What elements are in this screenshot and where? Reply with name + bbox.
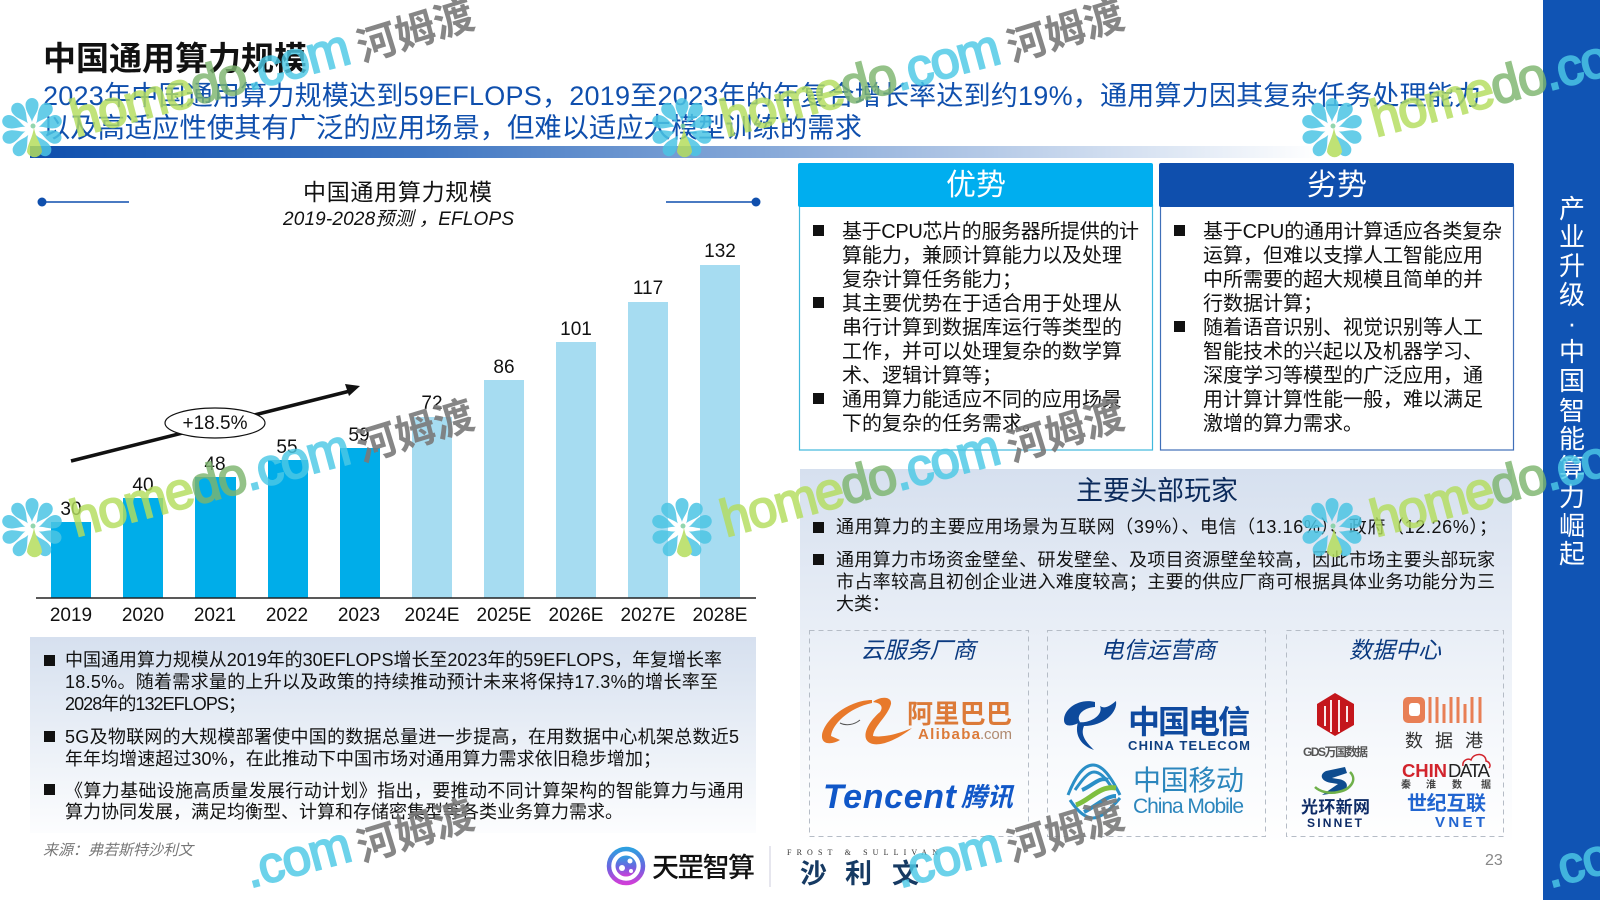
sidebar: 能 [1559, 424, 1585, 454]
bar chart: 30 [60, 499, 82, 520]
watermark layer: homedo.com [64, 418, 356, 549]
growth oval label [165, 408, 265, 438]
panel: disadvantages: 中所需要的超大规模且简单的并 [1203, 268, 1483, 291]
sidebar: 算 [1559, 453, 1585, 483]
logo: Chindata: DATA [1448, 760, 1491, 781]
panel: advantages: 术、逻辑计算等； [842, 364, 1002, 387]
panel: advantages: 复杂计算任务能力； [842, 268, 1022, 291]
logo: Frost and Sullivan [787, 848, 938, 889]
panel: advantages: 算能力，兼顾计算能力以及处理 [842, 244, 1122, 267]
box: cloud vendors [810, 630, 1028, 836]
logo: Tencent [823, 778, 1015, 816]
sidebar: 业 [1559, 222, 1585, 252]
watermark layer: homedo.com [714, 18, 1006, 149]
bar chart: 2027E [621, 605, 675, 626]
watermark layer: .com [238, 816, 357, 899]
bar chart: 40 [132, 475, 154, 496]
panel: key players: 通用算力市场资金壁垒、研发壁垒、及项目资源壁垒较高，因此市场主要头部玩家 [836, 550, 1495, 570]
title decoration left [38, 198, 129, 206]
logo: SINNET: SINNET [1307, 816, 1363, 830]
bar chart: 2025E [477, 605, 531, 626]
title: 中国通用算力规模 [43, 40, 307, 77]
panel: key players: 大类： [836, 594, 890, 614]
source note: 来源：弗若斯特沙利文 [43, 842, 195, 859]
watermark layer: homedo.com [714, 418, 1006, 549]
header gradient bar [30, 146, 1320, 158]
panel: chart commentary: 18.5%。随着需求量的上升以及政策的持续推动预计未来将保持17.3%的增长率至 [65, 672, 718, 692]
growth arrow [71, 384, 360, 461]
panel: disadvantages: 运算，但难以支撑人工智能应用 [1203, 244, 1483, 267]
logo: data port: 数据港 [1405, 731, 1483, 751]
panel: advantages: 其主要优势在于适合用于处理从 [842, 292, 1122, 315]
panel: chart commentary: 2028年的132EFLOPS； [65, 694, 246, 714]
bar chart: 2019 [50, 605, 92, 626]
panel: advantages: 基于CPU芯片的服务器所提供的计 [842, 220, 1139, 243]
panel: disadvantages [1159, 163, 1514, 450]
panel: advantages [798, 163, 1153, 450]
logo: VNET [1407, 792, 1486, 831]
panel: chart [36, 179, 760, 626]
logo: GDS: GDS万国数据 [1303, 744, 1368, 759]
logo: VNET: VNET [1435, 814, 1485, 831]
watermark layer: 河姆渡 [1002, 393, 1129, 471]
chart title: 中国通用算力规模 [303, 179, 492, 205]
logo: Alibaba: Alibaba [918, 726, 981, 743]
sidebar: 升 [1559, 251, 1585, 281]
box: telecom carriers: 电信运营商 [1100, 637, 1218, 663]
bar chart: 59 [348, 425, 370, 446]
panel: disadvantages: 行数据计算； [1203, 292, 1323, 315]
logo: Chindata: CHIN [1402, 760, 1447, 781]
panel: key players [800, 469, 1512, 845]
sidebar: 力 [1559, 482, 1585, 512]
logo: China Telecom [1064, 701, 1250, 753]
panel: chart commentary: 中国通用算力规模从2019年的30EFLOPS增长至2023年的59EFLOPS，年复增长率 [65, 650, 722, 670]
logo: SINNET [1301, 767, 1370, 830]
logo: Frost and Sullivan: 沙利文 [800, 859, 919, 889]
subtitle: 以及高适应性使其有广泛的应用场景，但难以适应大模型训练的需求 [43, 112, 862, 143]
logo: China Mobile: 中国移动 [1133, 765, 1244, 796]
logo: China Mobile: China Mobile [1133, 795, 1244, 818]
panel: disadvantages: 随着语音识别、视觉识别等人工 [1203, 316, 1483, 339]
watermark layer: homedo.com [64, 18, 356, 149]
panel: advantages: 通用算力能适应不同的应用场景 [842, 388, 1122, 411]
logo: Frost and Sullivan: FROST & SULLIVAN [787, 848, 938, 857]
sidebar [1543, 0, 1600, 900]
panel: chart commentary: 5G及物联网的大规模部署使中国的数据总量进一步提高，在用数据中心机架总数近5 [65, 727, 739, 747]
box: data centers [1286, 630, 1504, 836]
logo: China Telecom: 中国电信 [1128, 704, 1250, 740]
logo: China Mobile [1068, 765, 1244, 818]
disadvantages header: 劣势 [1307, 169, 1367, 202]
disadvantages header [1159, 163, 1514, 207]
logo divider [769, 846, 771, 887]
logo: Tencent: Tencent [823, 778, 958, 816]
bar chart: 117 [633, 278, 663, 299]
logo: Tianzheng compute: 天罡智算 [652, 853, 755, 883]
logo: Tencent: 腾讯 [961, 782, 1015, 812]
page number: 23 [1485, 852, 1503, 869]
sidebar: 崛 [1559, 511, 1585, 541]
sidebar: 产 [1559, 194, 1585, 224]
panel: advantages: 串行计算到数据库运行等类型的 [842, 316, 1122, 339]
sidebar: 中 [1559, 337, 1585, 367]
bar chart: 55 [276, 437, 298, 458]
panel: disadvantages: 智能技术的兴起以及机器学习、 [1203, 340, 1483, 363]
sidebar: 级 [1559, 280, 1585, 310]
watermark layer: .com [888, 816, 1007, 899]
sidebar: 起 [1559, 539, 1585, 569]
box: data centers: 数据中心 [1349, 637, 1442, 663]
bar chart: 101 [560, 319, 592, 340]
bar chart: 2022 [266, 605, 308, 626]
bar chart: 2023 [338, 605, 380, 626]
bar chart: 2024E [405, 605, 459, 626]
bar chart: 2020 [122, 605, 164, 626]
panel: advantages: 工作，并可以处理复杂的数学算 [842, 340, 1122, 363]
logo: GDS [1303, 693, 1368, 759]
bar chart: 72 [421, 393, 443, 414]
panel: disadvantages: 基于CPU的通用计算适应各类复杂 [1203, 220, 1502, 243]
bar chart: 2028E [693, 605, 747, 626]
logo: China Telecom: CHINA TELECOM [1128, 738, 1250, 753]
panel: disadvantages: 激增的算力需求。 [1203, 412, 1363, 435]
box: cloud vendors: 云服务厂商 [860, 637, 978, 663]
panel: chart commentary: 年年均增速超过30%，在此推动下中国市场对通用算力需求依旧稳步增加； [65, 749, 661, 769]
panel: chart commentary: 算力协同发展，满足均衡型、计算和存储密集型等各类业务算力需求。 [65, 802, 623, 822]
sidebar: 国 [1559, 366, 1585, 396]
logo: VNET: 世纪互联 [1407, 792, 1486, 815]
watermark layer: 河姆渡 [1002, 793, 1129, 871]
logo: Alibaba [822, 698, 1012, 744]
sidebar: 智 [1559, 396, 1585, 426]
panel: chart commentary [30, 637, 756, 833]
panel: key players: 通用算力的主要应用场景为互联网（39%）、电信（13.16%）、政府（12.26%）； [836, 517, 1497, 537]
watermark layer: 河姆渡 [352, 393, 479, 471]
growth oval label: +18.5% [183, 413, 248, 434]
key players heading: 主要头部玩家 [1076, 476, 1238, 506]
bar chart: 2021 [194, 605, 236, 626]
panel: advantages: 下的复杂的任务需求。 [842, 412, 1042, 435]
advantages header: 优势 [946, 169, 1006, 202]
subtitle: 2023年中国通用算力规模达到59EFLOPS，2019至2023年的年复合增长率达到约19%，通用算力因其复杂任务处理能力 [43, 81, 1481, 111]
logo: Alibaba: 阿里巴巴 [907, 699, 1012, 729]
panel: chart commentary: 《算力基础设施高质量发展行动计划》指出，要推动不同计算架构的智能算力与通用 [65, 781, 744, 801]
chart subtitle: 2019-2028预测 ，EFLOPS [282, 209, 514, 230]
bar chart: 132 [704, 241, 736, 262]
bar chart: 2026E [549, 605, 603, 626]
watermark layer: 河姆渡 [352, 793, 479, 871]
logo: Alibaba: .com [980, 726, 1012, 743]
logo: Chindata: 秦淮数据 [1401, 778, 1491, 791]
logo: Chindata [1401, 754, 1491, 791]
sidebar: · [1568, 308, 1576, 338]
logo: Tianzheng compute [609, 849, 755, 883]
logo: SINNET: 光环新网 [1301, 797, 1370, 817]
panel: key players: 市占率较高且初创企业进入难度较高；主要的供应厂商可根据具体业务功能分为三 [836, 572, 1495, 592]
panel: disadvantages: 深度学习等模型的广泛应用，通 [1203, 364, 1483, 387]
box: telecom carriers [1048, 630, 1266, 836]
logo: data port [1403, 697, 1483, 751]
subtitle [43, 81, 1481, 143]
bar chart: 86 [493, 357, 515, 378]
advantages header [798, 163, 1153, 207]
panel: disadvantages: 用计算计算性能一般，难以满足 [1203, 388, 1483, 411]
bar chart [36, 241, 756, 626]
title decoration right [666, 198, 760, 206]
bar chart: 48 [204, 454, 226, 475]
